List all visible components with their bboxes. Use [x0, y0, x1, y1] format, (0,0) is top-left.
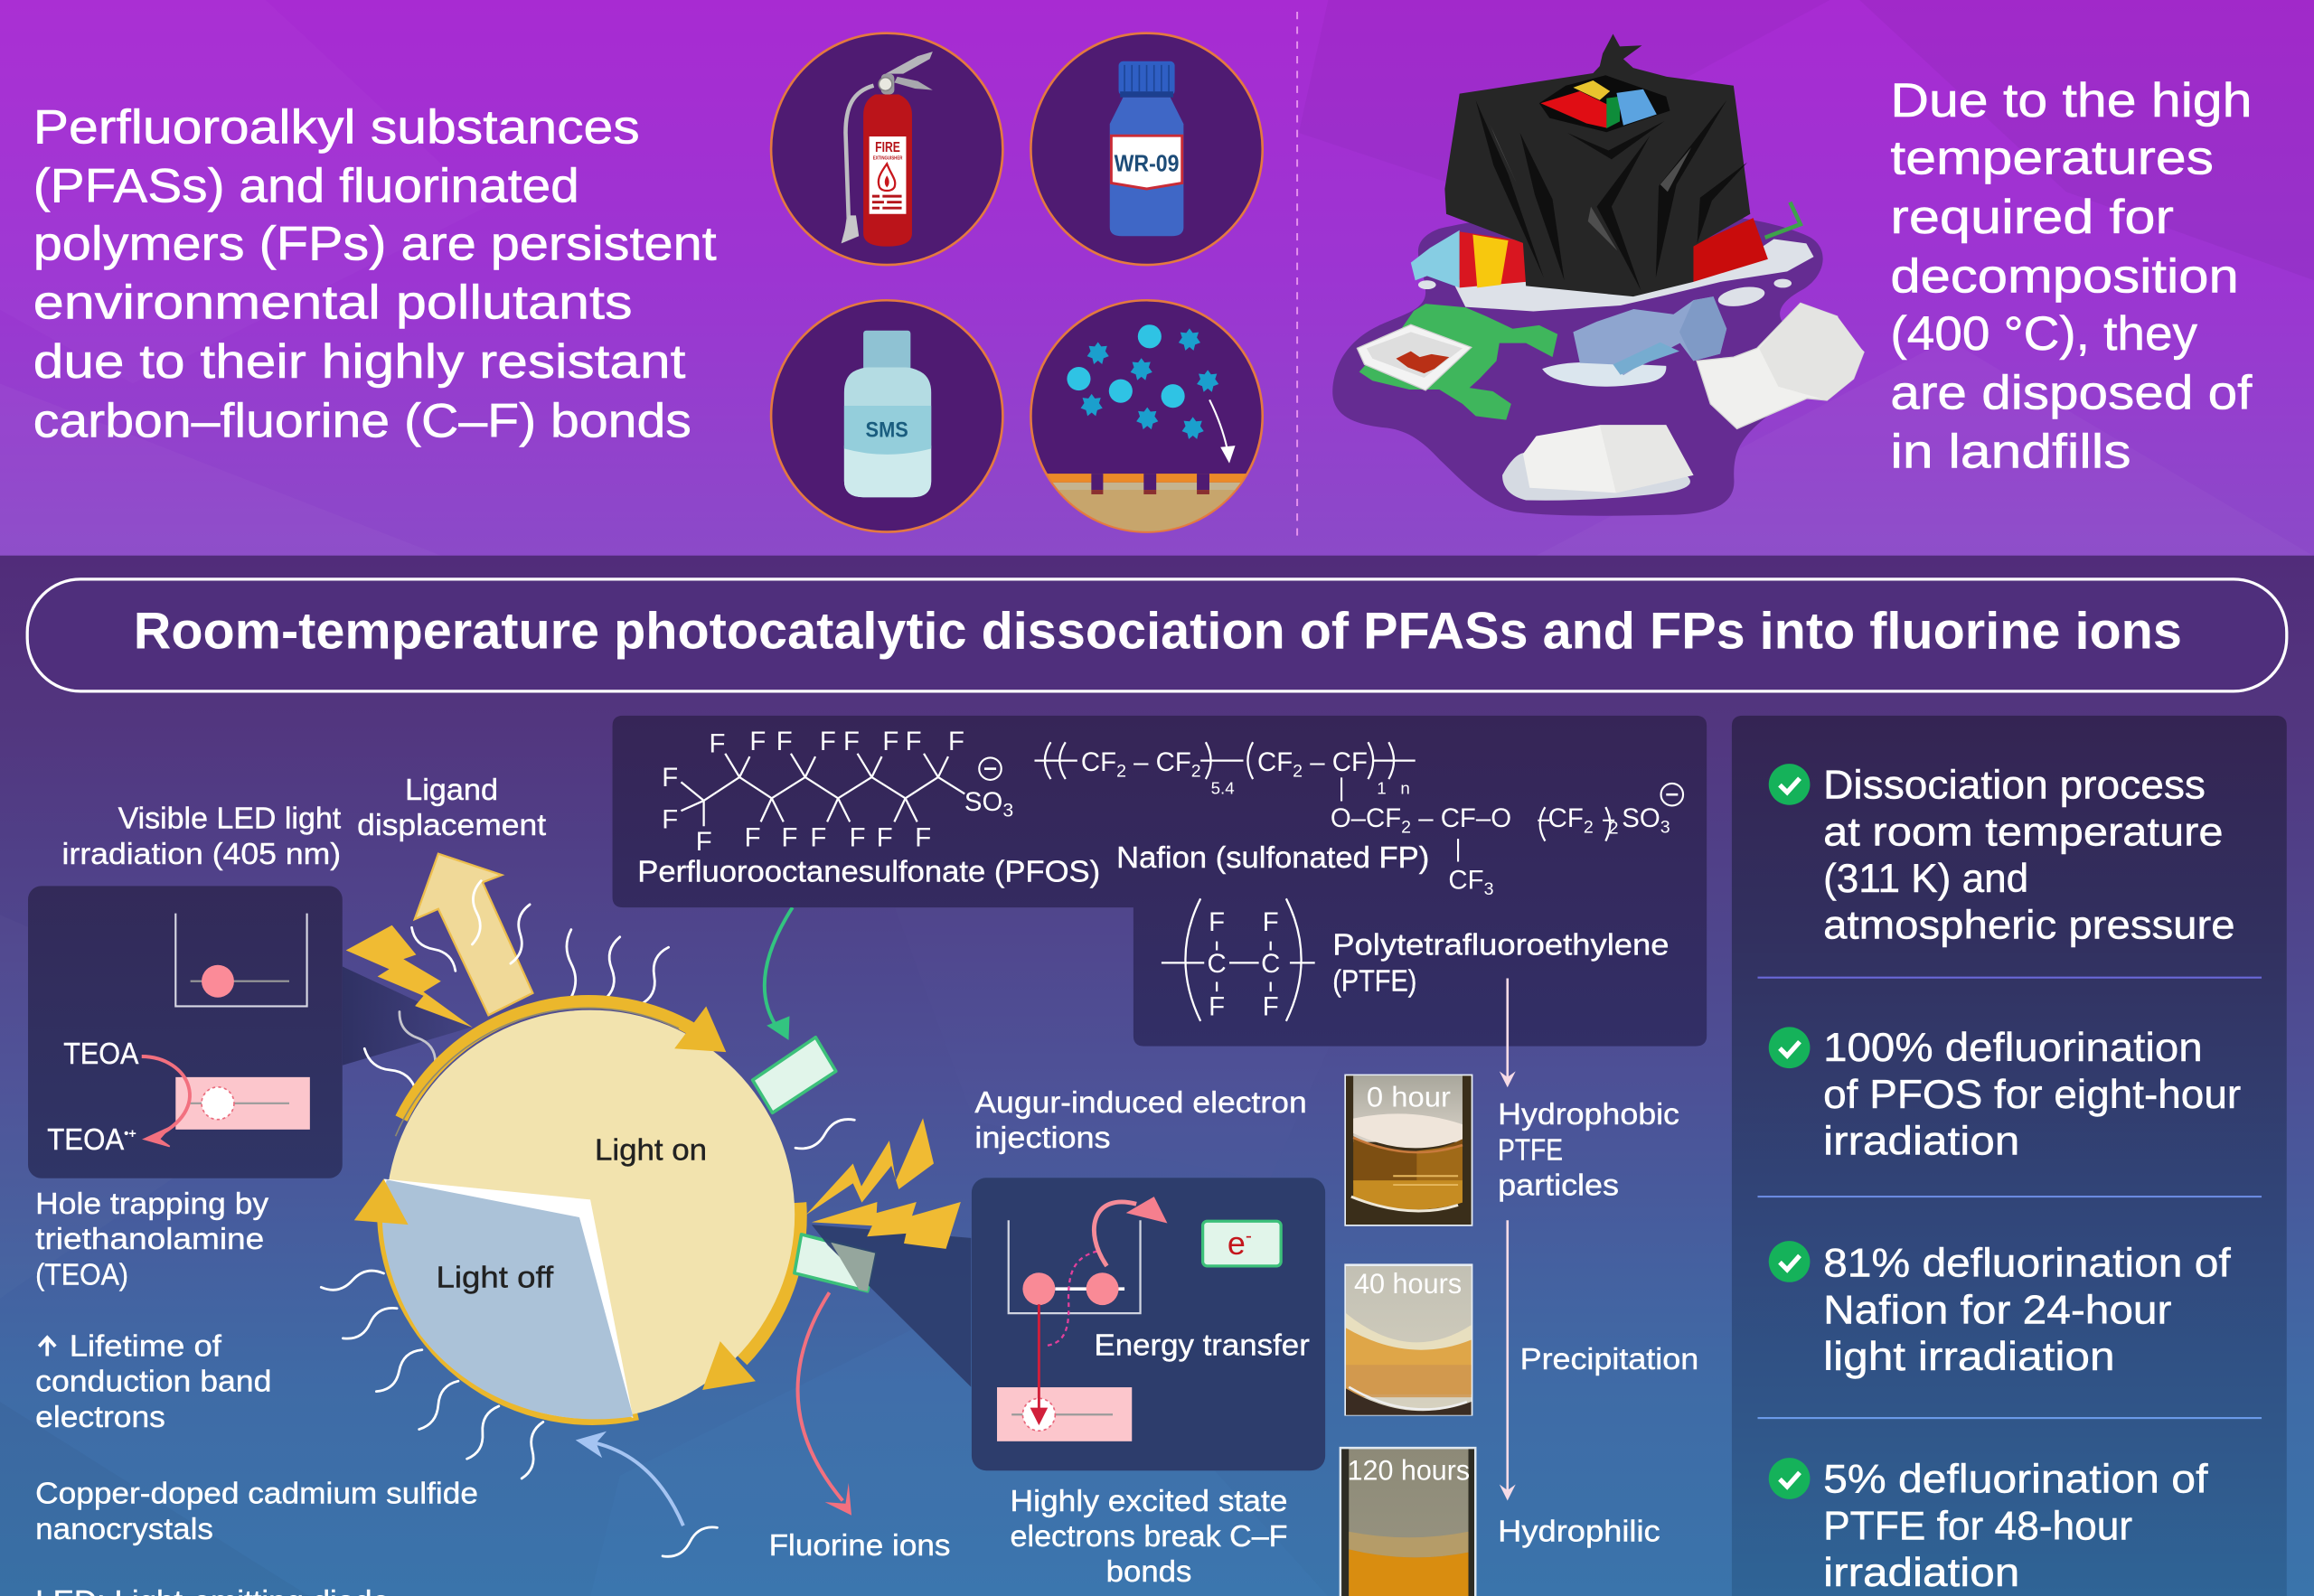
- waste: food tray: [1357, 324, 1472, 390]
- disposal text: are disposed of: [1890, 366, 2253, 419]
- label: lifetime of conduction band electrons: conduction band: [35, 1366, 271, 1399]
- photo: 0 hour vial: 0 hour: [1367, 1082, 1451, 1113]
- label: highly excited state: bonds: [1106, 1555, 1191, 1589]
- photo: 0 hour vial: [1344, 1075, 1472, 1226]
- label: lifetime of conduction band electrons: [35, 1329, 271, 1434]
- label: ligand displacement: Ligand: [405, 774, 498, 807]
- intro text: PFAS pollutants: Perfluoroalkyl substances: [33, 100, 640, 154]
- Nafion structure: CF: [1448, 866, 1484, 896]
- panel: energy transfer diagram: -: [1246, 1226, 1252, 1247]
- top banner background: [0, 0, 2314, 557]
- Nafion structure: [1034, 742, 1683, 899]
- icon: blue bottle WR-09: [1030, 33, 1263, 265]
- result 1: [1769, 761, 2235, 947]
- Nafion structure: – CF–O: [1411, 803, 1511, 833]
- label: visible LED light: irradiation (405 nm): [62, 838, 341, 871]
- PFOS structure: F: [709, 729, 725, 759]
- label: Augur-induced: Augur-induced electron: [974, 1086, 1307, 1120]
- Nafion structure: 2: [1609, 818, 1618, 838]
- illustration: garbage bag and plastic waste: [1332, 34, 1864, 516]
- arrowheads on ring: [354, 1006, 756, 1390]
- PFOS structure: F: [745, 822, 761, 852]
- Nafion structure: 2: [1191, 762, 1201, 782]
- icon: fire extinguisher: EXTINGUISHER: [873, 155, 903, 161]
- icon: lightning lower: [812, 1202, 961, 1249]
- PFOS structure: F: [915, 822, 931, 852]
- label: nanocrystals: nanocrystals: [35, 1513, 213, 1546]
- title banner: Room-temperature photocatalytic dissociation of PFASs and FPs into fluorine ions: [134, 603, 2182, 661]
- lower section background: [0, 556, 2314, 1596]
- panel: polymer structures: [613, 716, 1707, 1047]
- disposal text: temperatures: [1890, 132, 2214, 185]
- panel: energy transfer diagram: [795, 1118, 1325, 1470]
- intro text: PFAS pollutants: due to their highly resistant: [33, 335, 686, 389]
- waste: foam box right: [1697, 303, 1864, 428]
- label: nanocrystals: [35, 1478, 478, 1546]
- waste: black garbage bag: [1444, 34, 1750, 296]
- icon: particles settling on ground: [1030, 299, 1264, 533]
- PFOS structure: F: [843, 727, 860, 756]
- intro text: PFAS pollutants: polymers (FPs) are persistent: [33, 217, 717, 270]
- result 4: 5% defluorination of: [1823, 1455, 2208, 1501]
- PFOS structure: F: [662, 763, 678, 793]
- icon: SMS bottle: [771, 300, 1002, 532]
- label: fluorine ions: Fluorine ions: [769, 1529, 950, 1563]
- panel: hole trapping well diagram: [28, 886, 472, 1178]
- dashed divider: [1296, 12, 1298, 540]
- result 3: Nafion for 24-hour: [1823, 1287, 2172, 1333]
- Nafion structure: 2: [1584, 818, 1594, 838]
- label: light off: Light off: [436, 1262, 554, 1295]
- PFOS structure: 3: [1002, 801, 1013, 821]
- label: hydrophobic PTFE particles: Hydrophobic: [1498, 1098, 1679, 1131]
- label: visible LED light: [62, 803, 342, 871]
- intro text: PFAS pollutants: environmental pollutants: [33, 277, 633, 330]
- Nafion structure: 1: [1377, 778, 1387, 797]
- PFOS structure: [662, 727, 1013, 857]
- panel: energy transfer diagram: e: [1228, 1225, 1246, 1262]
- PTFE structure: F: [1263, 907, 1279, 937]
- label: hydrophobic PTFE particles: PTFE: [1498, 1133, 1563, 1167]
- PFOS structure: F: [696, 827, 712, 857]
- label: ligand displacement: displacement: [357, 809, 547, 842]
- result 1: Dissociation process: [1823, 761, 2206, 807]
- icon: lightning left: [346, 925, 473, 1028]
- Nafion structure: 5.4: [1211, 778, 1235, 797]
- panel: hole trapping well diagram: •+: [124, 1127, 136, 1141]
- result 1: atmospheric pressure: [1823, 901, 2235, 947]
- panel: hole trapping well diagram: TEOA: [47, 1123, 125, 1157]
- label: lifetime of conduction band electrons: Lifetime of: [70, 1329, 222, 1363]
- icon: blue bottle WR-09: WR-09: [1115, 149, 1179, 176]
- Nafion structure: CF: [1257, 747, 1293, 777]
- PFOS structure: F: [948, 727, 964, 756]
- intro text: PFAS pollutants: [33, 100, 717, 447]
- PTFE structure: C: [1208, 949, 1227, 979]
- arrow: precipitation: [1500, 1220, 1516, 1500]
- label: hole trapping: triethanolamine: [35, 1223, 264, 1256]
- PFOS structure: F: [749, 727, 766, 756]
- Nafion structure: 3: [1660, 818, 1670, 838]
- label: precipitation: Precipitation: [1520, 1343, 1698, 1376]
- PFOS structure: F: [662, 805, 678, 835]
- icon: fire extinguisher: [771, 33, 1002, 265]
- arrow: fluorine ions (red): [798, 1292, 851, 1516]
- orange ring arcs: [383, 1001, 800, 1419]
- binding site right: [795, 1235, 875, 1291]
- label: light on: Light on: [595, 1133, 707, 1167]
- label: Augur-induced: injections: [974, 1122, 1111, 1155]
- disposal text: [1890, 74, 2253, 479]
- result 4: irradiation: [1823, 1549, 2019, 1595]
- Nafion structure: CF: [1081, 747, 1116, 777]
- PTFE structure: C: [1261, 949, 1280, 979]
- label: highly excited state: [1011, 1485, 1287, 1589]
- label: hole trapping: Hole trapping by: [35, 1188, 268, 1221]
- label: highly excited state: electrons break C–F: [1011, 1520, 1287, 1554]
- arrow: ligand displacement: [415, 854, 532, 1015]
- nanocrystal disc: [382, 1008, 795, 1419]
- label: hole trapping: (TEOA): [35, 1258, 128, 1291]
- label: lifetime of conduction band electrons: electrons: [35, 1401, 165, 1434]
- disposal text: in landfills: [1890, 426, 2131, 479]
- label: hydrophobic PTFE particles: [1498, 1098, 1679, 1202]
- Nafion structure: – CF: [1303, 747, 1368, 777]
- icon: fire extinguisher: FIRE: [875, 140, 900, 155]
- result 1: at room temperature: [1823, 809, 2224, 855]
- disposal text: Due to the high: [1890, 74, 2252, 127]
- icon: lightning upper: [805, 1118, 934, 1216]
- photo: 40 hours vial: [1344, 1263, 1472, 1416]
- PFOS structure: F: [877, 822, 893, 852]
- result 3: 81% defluorination of: [1823, 1239, 2231, 1285]
- waste: left cup: [1411, 230, 1526, 287]
- icon: SMS bottle: SMS: [866, 418, 908, 442]
- PFOS structure: SO: [964, 787, 1002, 817]
- result 3: light irradiation: [1823, 1333, 2115, 1379]
- panel: energy transfer diagram: Energy transfer: [1094, 1329, 1310, 1363]
- label: highly excited state: Highly excited state: [1011, 1485, 1287, 1518]
- Nafion structure: 3: [1484, 879, 1494, 899]
- Nafion structure: 2: [1401, 818, 1411, 838]
- PFOS structure: F: [820, 727, 836, 756]
- label: visible LED light: Visible LED light: [118, 803, 342, 836]
- intro text: PFAS pollutants: carbon–fluorine (C–F) bonds: [33, 394, 691, 447]
- waste: green plastic bag: [1359, 304, 1557, 420]
- photo: 120 hours vial: [1340, 1447, 1476, 1596]
- Nafion structure: O–CF: [1331, 803, 1401, 833]
- Nafion structure: – CF: [1126, 747, 1191, 777]
- disposal text: required for: [1890, 191, 2174, 244]
- Nafion structure: n: [1400, 778, 1410, 797]
- result 4: PTFE for 48-hour: [1823, 1503, 2132, 1549]
- panel: hole trapping well diagram: TEOA: [63, 1037, 139, 1071]
- label: PTFE: Polytetrafluoroethylene: [1332, 928, 1670, 962]
- photo: 40 hours vial: 40 hours: [1354, 1268, 1462, 1300]
- PFOS structure: F: [906, 727, 922, 756]
- PFOS structure: F: [850, 822, 866, 852]
- label: hole trapping: [35, 1188, 268, 1291]
- PTFE structure: [1162, 898, 1315, 1021]
- label: hydrophilic: Hydrophilic: [1498, 1515, 1660, 1548]
- label: hydrophobic PTFE particles: particles: [1498, 1169, 1619, 1202]
- label: PFOS: Perfluorooctanesulfonate (PFOS): [637, 856, 1100, 889]
- waste: crushed bottle: [1542, 296, 1726, 387]
- waste: spill under bag: [1453, 239, 1814, 311]
- result 3: [1769, 1239, 2231, 1379]
- binding site top: [753, 1037, 836, 1113]
- result 1: (311 K) and: [1823, 855, 2028, 901]
- disposal text: decomposition: [1890, 249, 2239, 303]
- result 2: 100% defluorination: [1823, 1024, 2203, 1070]
- label: nanocrystals: Copper-doped cadmium sulfide: [35, 1478, 478, 1511]
- panel: key results: [1732, 716, 2287, 1596]
- photo: 120 hours vial: 120 hours: [1348, 1455, 1470, 1487]
- label: Nafion: Nafion (sulfonated FP): [1116, 841, 1429, 875]
- label: PTFE: [1332, 928, 1670, 998]
- PFOS structure: F: [776, 727, 793, 756]
- PTFE structure: F: [1209, 991, 1225, 1021]
- waste: spill ellipses: [1418, 279, 1792, 309]
- decorative ligands: [321, 881, 854, 1556]
- PTFE structure: F: [1263, 991, 1279, 1021]
- arrow: blue to nanocrystal: [576, 1432, 683, 1526]
- label: PTFE: (PTFE): [1332, 964, 1416, 998]
- arrow: PFOS to site (green): [765, 907, 793, 1040]
- PFOS structure: F: [882, 727, 898, 756]
- result 2: [1769, 1024, 2241, 1164]
- label: Augur-induced: [974, 1086, 1307, 1155]
- PFOS structure: F: [781, 822, 797, 852]
- intro text: PFAS pollutants: (PFASs) and fluorinated: [33, 160, 579, 213]
- waste: foam box bottom: [1502, 425, 1693, 501]
- arrow: PTFE to hydrophobic particles: [1500, 978, 1516, 1087]
- PFOS structure: F: [810, 822, 826, 852]
- title banner: [27, 579, 2287, 691]
- result 4: [1769, 1455, 2208, 1595]
- Nafion structure: SO: [1622, 803, 1660, 833]
- disposal text: (400 °C), they: [1890, 307, 2198, 361]
- waste: right red cup: [1689, 218, 1768, 282]
- result 2: of PFOS for eight-hour: [1823, 1071, 2241, 1117]
- label: ligand displacement: [357, 774, 547, 842]
- result 2: irradiation: [1823, 1118, 2019, 1164]
- Nafion structure: 2: [1293, 762, 1303, 782]
- nanocrystal diagram: [321, 854, 854, 1556]
- PTFE structure: F: [1209, 907, 1225, 937]
- Nafion structure: CF: [1548, 803, 1584, 833]
- waste: green straw: [1765, 202, 1801, 238]
- Nafion structure: 2: [1116, 762, 1126, 782]
